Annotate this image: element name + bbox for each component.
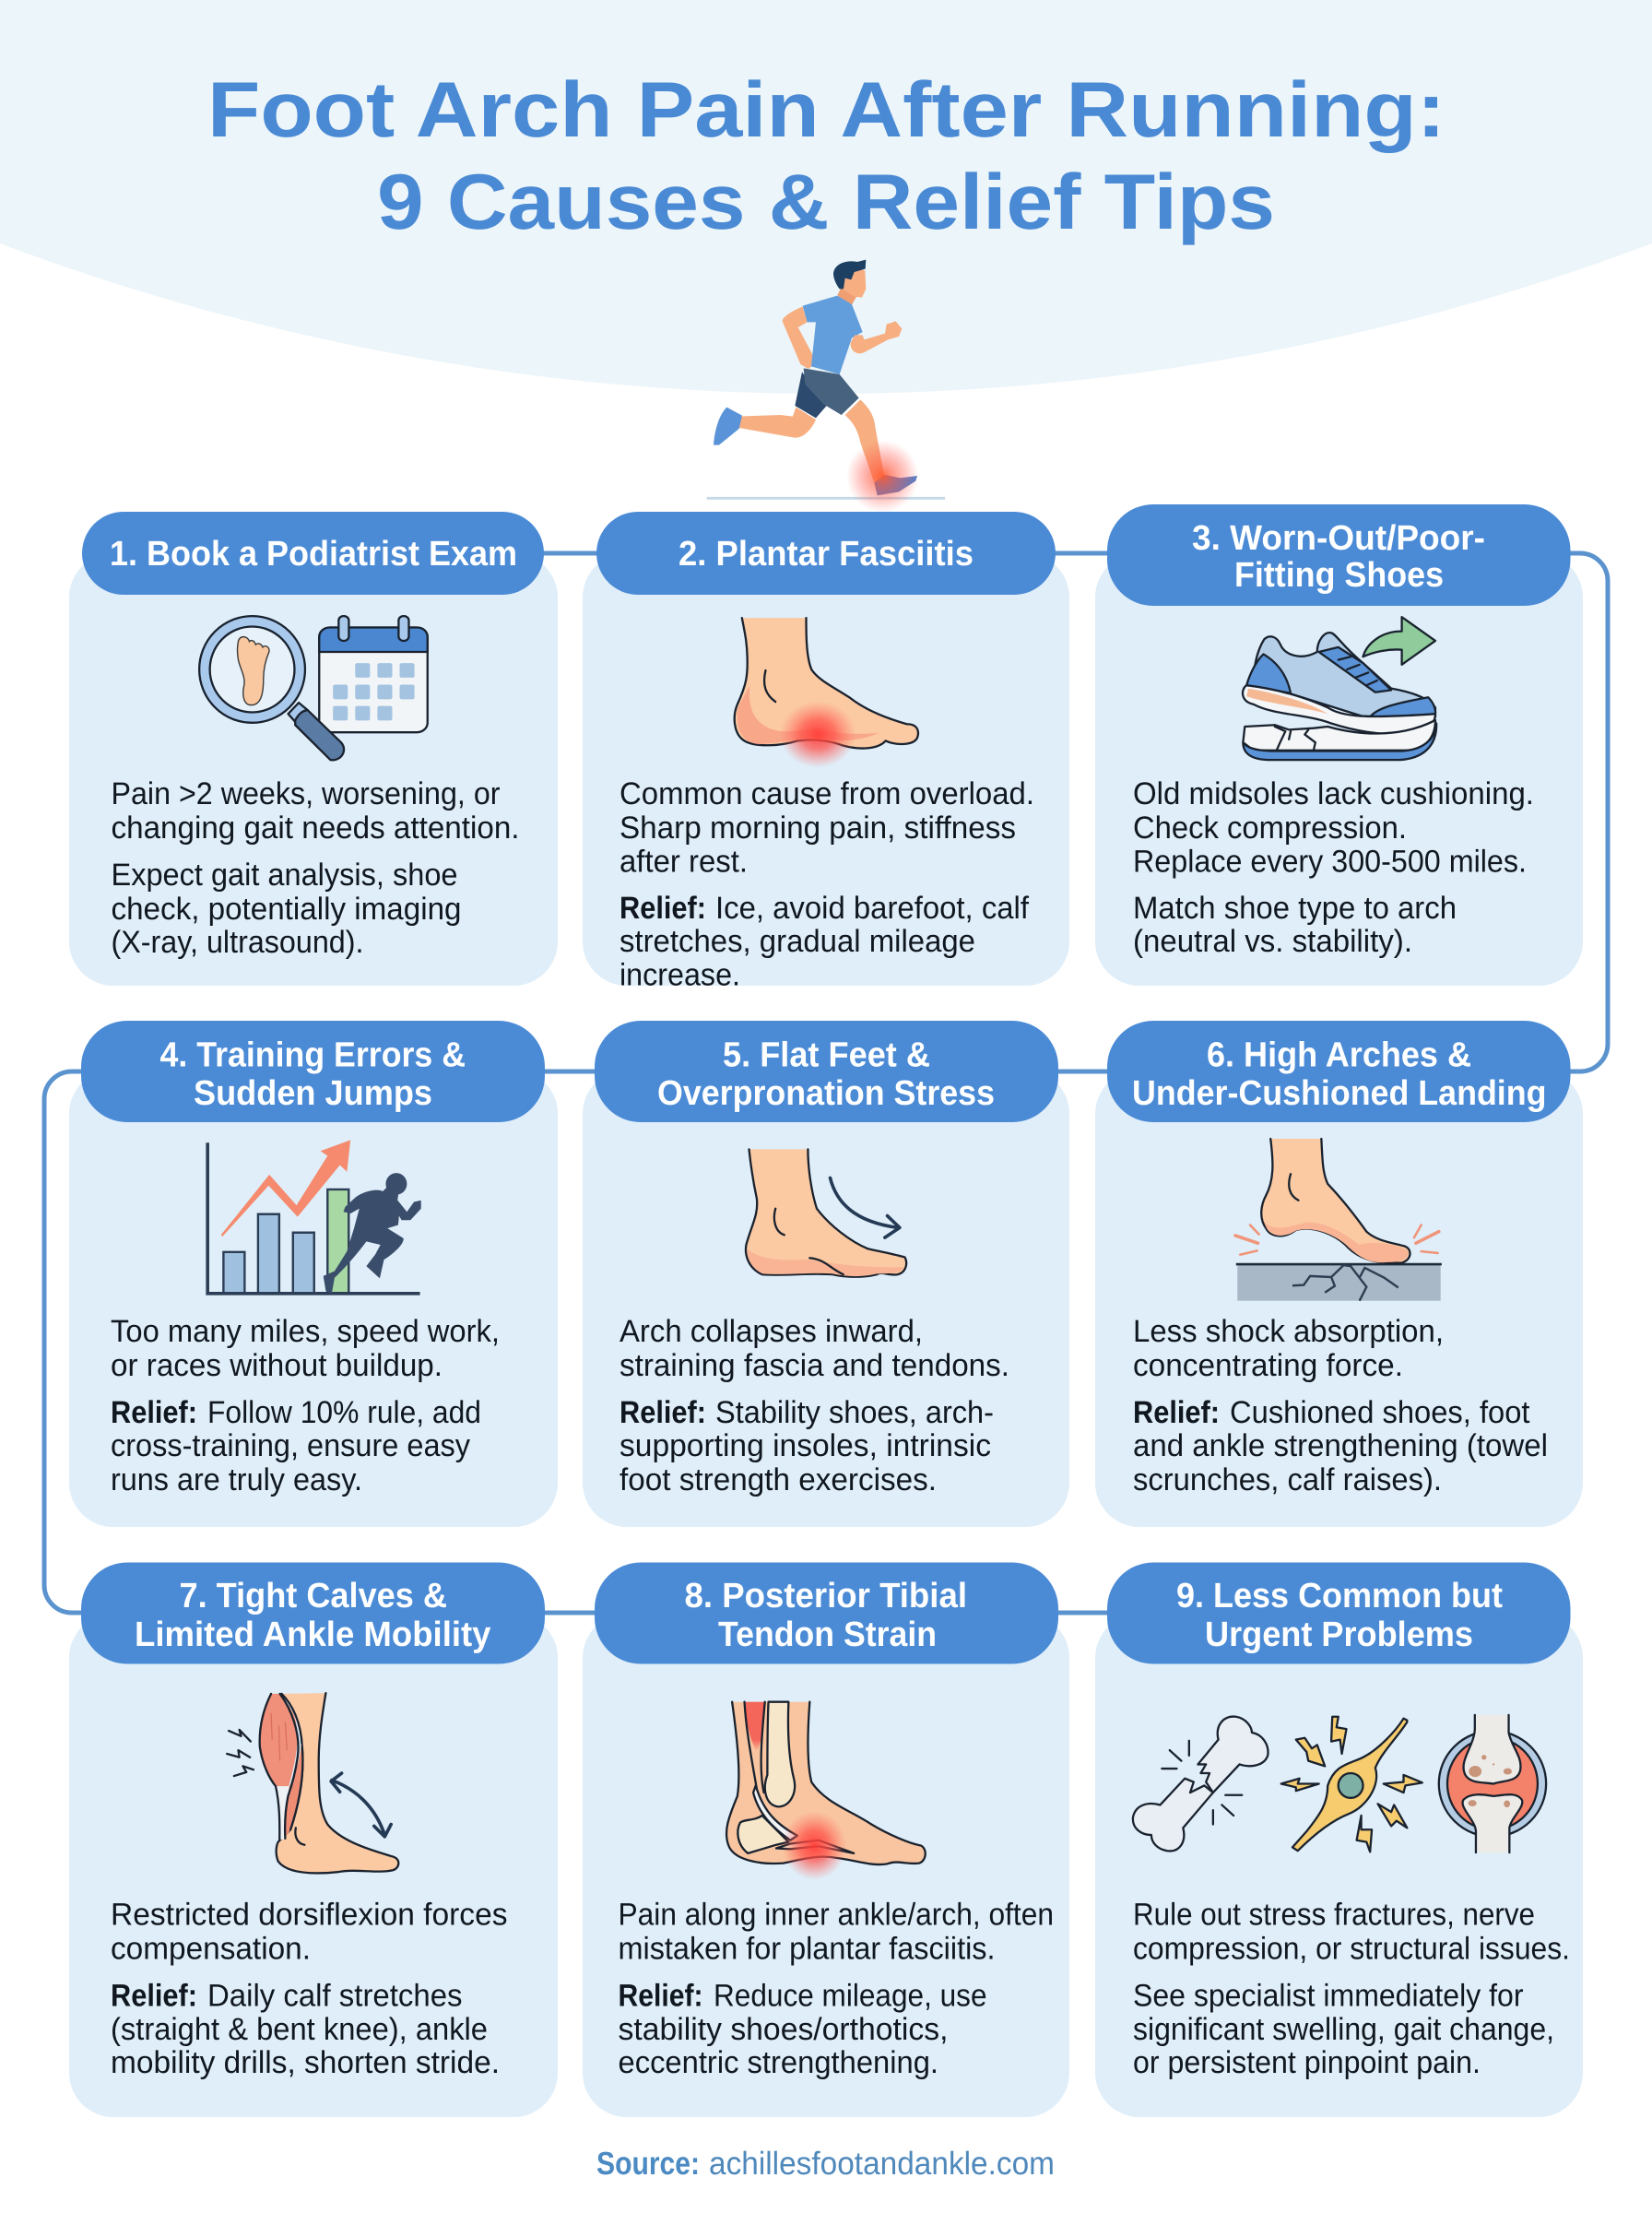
body text 8: Relief: xyxy=(618,1979,702,2014)
body text 4: cross-training, ensure easy xyxy=(111,1428,470,1463)
panel: 5 Flat Feet xyxy=(583,1021,1069,1527)
body text 6 xyxy=(1133,1314,1548,1497)
title: 9 Causes & Relief Tips xyxy=(377,159,1275,246)
heading 1: 1. Book a Podiatrist Exam xyxy=(110,535,517,574)
body text 6: Less shock absorption, xyxy=(1133,1314,1444,1349)
body text 2: Sharp morning pain, stiffness xyxy=(620,811,1016,846)
illustration: runner with foot pain xyxy=(707,260,945,513)
card background 7 xyxy=(69,1614,558,2117)
body text 2: after rest. xyxy=(620,845,748,880)
card background 5 xyxy=(583,1070,1069,1527)
heading 4: 4. Training Errors & xyxy=(160,1036,466,1075)
body text 3: Replace every 300-500 miles. xyxy=(1133,845,1527,880)
body text 2: increase. xyxy=(620,957,740,992)
heading 9: 9. Less Common but xyxy=(1176,1577,1503,1615)
panel: 2 Plantar Fasciitis xyxy=(583,512,1069,992)
card background 3 xyxy=(1095,553,1583,986)
body text 8 xyxy=(618,1898,1054,2080)
icon: rising bar chart with runner xyxy=(207,1140,421,1294)
heading 9 xyxy=(1107,1562,1571,1663)
body text 8: Pain along inner ankle/arch, often xyxy=(618,1898,1054,1933)
body text 5 xyxy=(620,1314,1009,1497)
icon: worn shoe with replace arrow xyxy=(1243,617,1436,760)
icon: high arch foot on cracked ground xyxy=(1235,1139,1442,1301)
body text 1: Pain >2 weeks, worsening, or xyxy=(111,776,500,811)
body text 1: (X-ray, ultrasound). xyxy=(111,925,363,960)
body text 4: runs are truly easy. xyxy=(111,1462,362,1497)
heading 8 xyxy=(595,1562,1058,1663)
body text 2: stretches, gradual mileage xyxy=(620,924,975,959)
heading 6: Under-Cushioned Landing xyxy=(1132,1074,1547,1113)
body text 2: Ice, avoid barefoot, calf xyxy=(715,891,1030,926)
panel: 9 Less Common but Urgent xyxy=(1095,1562,1583,2117)
heading 9: Urgent Problems xyxy=(1205,1615,1473,1654)
heading 4 xyxy=(81,1021,545,1122)
icon: fractured bone, nerve, inflamed joint xyxy=(1133,1715,1546,1852)
panel: 3 Worn-Out/Poor-Fitting Shoes xyxy=(1095,504,1583,986)
heading 8: 8. Posterior Tibial xyxy=(684,1577,967,1615)
body text 1 xyxy=(111,776,520,960)
body text 9: significant swelling, gait change, xyxy=(1133,2012,1554,2047)
body text 7: Relief: xyxy=(111,1979,197,2014)
body text 7: compensation. xyxy=(111,1931,311,1966)
icon: foot anatomy with tibial tendon xyxy=(726,1702,926,1880)
icon: foot with plantar heat spot xyxy=(735,618,918,768)
body text 5: foot strength exercises. xyxy=(620,1462,937,1497)
body text 8: Reduce mileage, use xyxy=(714,1979,986,2014)
body text 3: Match shoe type to arch xyxy=(1133,891,1457,926)
panel: 4 Training Errors xyxy=(69,1021,558,1527)
body text 8: stability shoes/orthotics, xyxy=(618,2012,948,2047)
body text 6: Cushioned shoes, foot xyxy=(1230,1395,1530,1430)
heading 6: 6. High Arches & xyxy=(1207,1036,1471,1075)
body text 2: Common cause from overload. xyxy=(620,776,1034,811)
body text 8: eccentric strengthening. xyxy=(618,2045,938,2080)
body text 4: Follow 10% rule, add xyxy=(207,1395,481,1430)
body text 8: mistaken for plantar fasciitis. xyxy=(618,1931,996,1966)
heading 8: Tendon Strain xyxy=(718,1615,937,1654)
body text 3: Old midsoles lack cushioning. xyxy=(1133,776,1534,811)
body text 6: and ankle strengthening (towel xyxy=(1133,1428,1548,1463)
icon: calf muscle and ankle motion xyxy=(227,1693,398,1873)
heading 3: 3. Worn-Out/Poor- xyxy=(1192,519,1485,558)
heading 3: Fitting Shoes xyxy=(1234,556,1444,595)
title: Foot Arch Pain After Running: xyxy=(207,66,1446,154)
body text 5: Arch collapses inward, xyxy=(620,1314,923,1349)
heading 5: 5. Flat Feet & xyxy=(723,1036,930,1075)
body text 5: straining fascia and tendons. xyxy=(620,1348,1009,1383)
body text 9: See specialist immediately for xyxy=(1133,1979,1523,2014)
card background 2 xyxy=(583,553,1069,986)
card background 9 xyxy=(1095,1614,1583,2117)
body text 3: Check compression. xyxy=(1133,811,1407,846)
body text 3 xyxy=(1133,776,1534,959)
icon: magnifier over foot and calendar xyxy=(199,616,428,760)
body text 7: Restricted dorsiflexion forces xyxy=(111,1898,507,1933)
heading 5: Overpronation Stress xyxy=(657,1074,995,1113)
panel: 1 Book a Podiatrist Exam xyxy=(69,512,558,986)
source footer: achillesfootandankle.com xyxy=(709,2146,1055,2182)
body text 3: (neutral vs. stability). xyxy=(1133,924,1412,959)
connector line between steps xyxy=(44,553,1608,1613)
heading 6 xyxy=(1107,1021,1571,1122)
heading 4: Sudden Jumps xyxy=(194,1074,432,1113)
body text 9: or persistent pinpoint pain. xyxy=(1133,2045,1481,2080)
body text 1: Expect gait analysis, shoe xyxy=(111,858,457,893)
heading 7: 7. Tight Calves & xyxy=(179,1577,447,1615)
card background 8 xyxy=(583,1614,1069,2117)
body text 6: scrunches, calf raises). xyxy=(1133,1462,1442,1497)
body text 6: concentrating force. xyxy=(1133,1348,1403,1383)
source footer: Source: xyxy=(596,2146,700,2182)
body text 2 xyxy=(620,776,1034,992)
body text 6: Relief: xyxy=(1133,1395,1220,1430)
body text 5: Relief: xyxy=(620,1395,706,1430)
heading 7: Limited Ankle Mobility xyxy=(135,1615,490,1654)
body text 9: Rule out stress fractures, nerve xyxy=(1133,1898,1535,1933)
heading 5 xyxy=(595,1021,1058,1122)
heading 2 xyxy=(596,512,1056,595)
body text 7 xyxy=(111,1898,507,2080)
body text 5: Stability shoes, arch- xyxy=(715,1395,994,1430)
body text 9 xyxy=(1133,1898,1570,2080)
body text 4: Relief: xyxy=(111,1395,197,1430)
body text 7: (straight & bent knee), ankle xyxy=(111,2012,488,2047)
heading 7 xyxy=(81,1562,545,1663)
body text 7: Daily calf stretches xyxy=(207,1979,463,2014)
panel: 8 Posterior Tibial xyxy=(583,1562,1069,2117)
panel: 6 High Arches xyxy=(1095,1021,1583,1527)
card background 6 xyxy=(1095,1070,1583,1527)
body text 4: Too many miles, speed work, xyxy=(111,1314,500,1349)
body text 4 xyxy=(111,1314,500,1497)
body text 1: check, potentially imaging xyxy=(111,892,461,927)
title xyxy=(207,66,1446,246)
header background arc xyxy=(0,0,1652,394)
icon: flat foot with arrow xyxy=(746,1149,906,1277)
panel: 7 Tight Calves xyxy=(69,1562,558,2117)
card background 1 xyxy=(69,553,558,986)
heading 3 xyxy=(1107,504,1571,606)
body text 5: supporting insoles, intrinsic xyxy=(620,1428,991,1463)
body text 4: or races without buildup. xyxy=(111,1348,442,1383)
card background 4 xyxy=(69,1070,558,1527)
body text 1: changing gait needs attention. xyxy=(111,811,520,846)
body text 9: compression, or structural issues. xyxy=(1133,1931,1570,1966)
body text 7: mobility drills, shorten stride. xyxy=(111,2045,500,2080)
body text 2: Relief: xyxy=(620,891,706,926)
heading 1 xyxy=(82,512,544,595)
heading 2: 2. Plantar Fasciitis xyxy=(678,535,974,574)
